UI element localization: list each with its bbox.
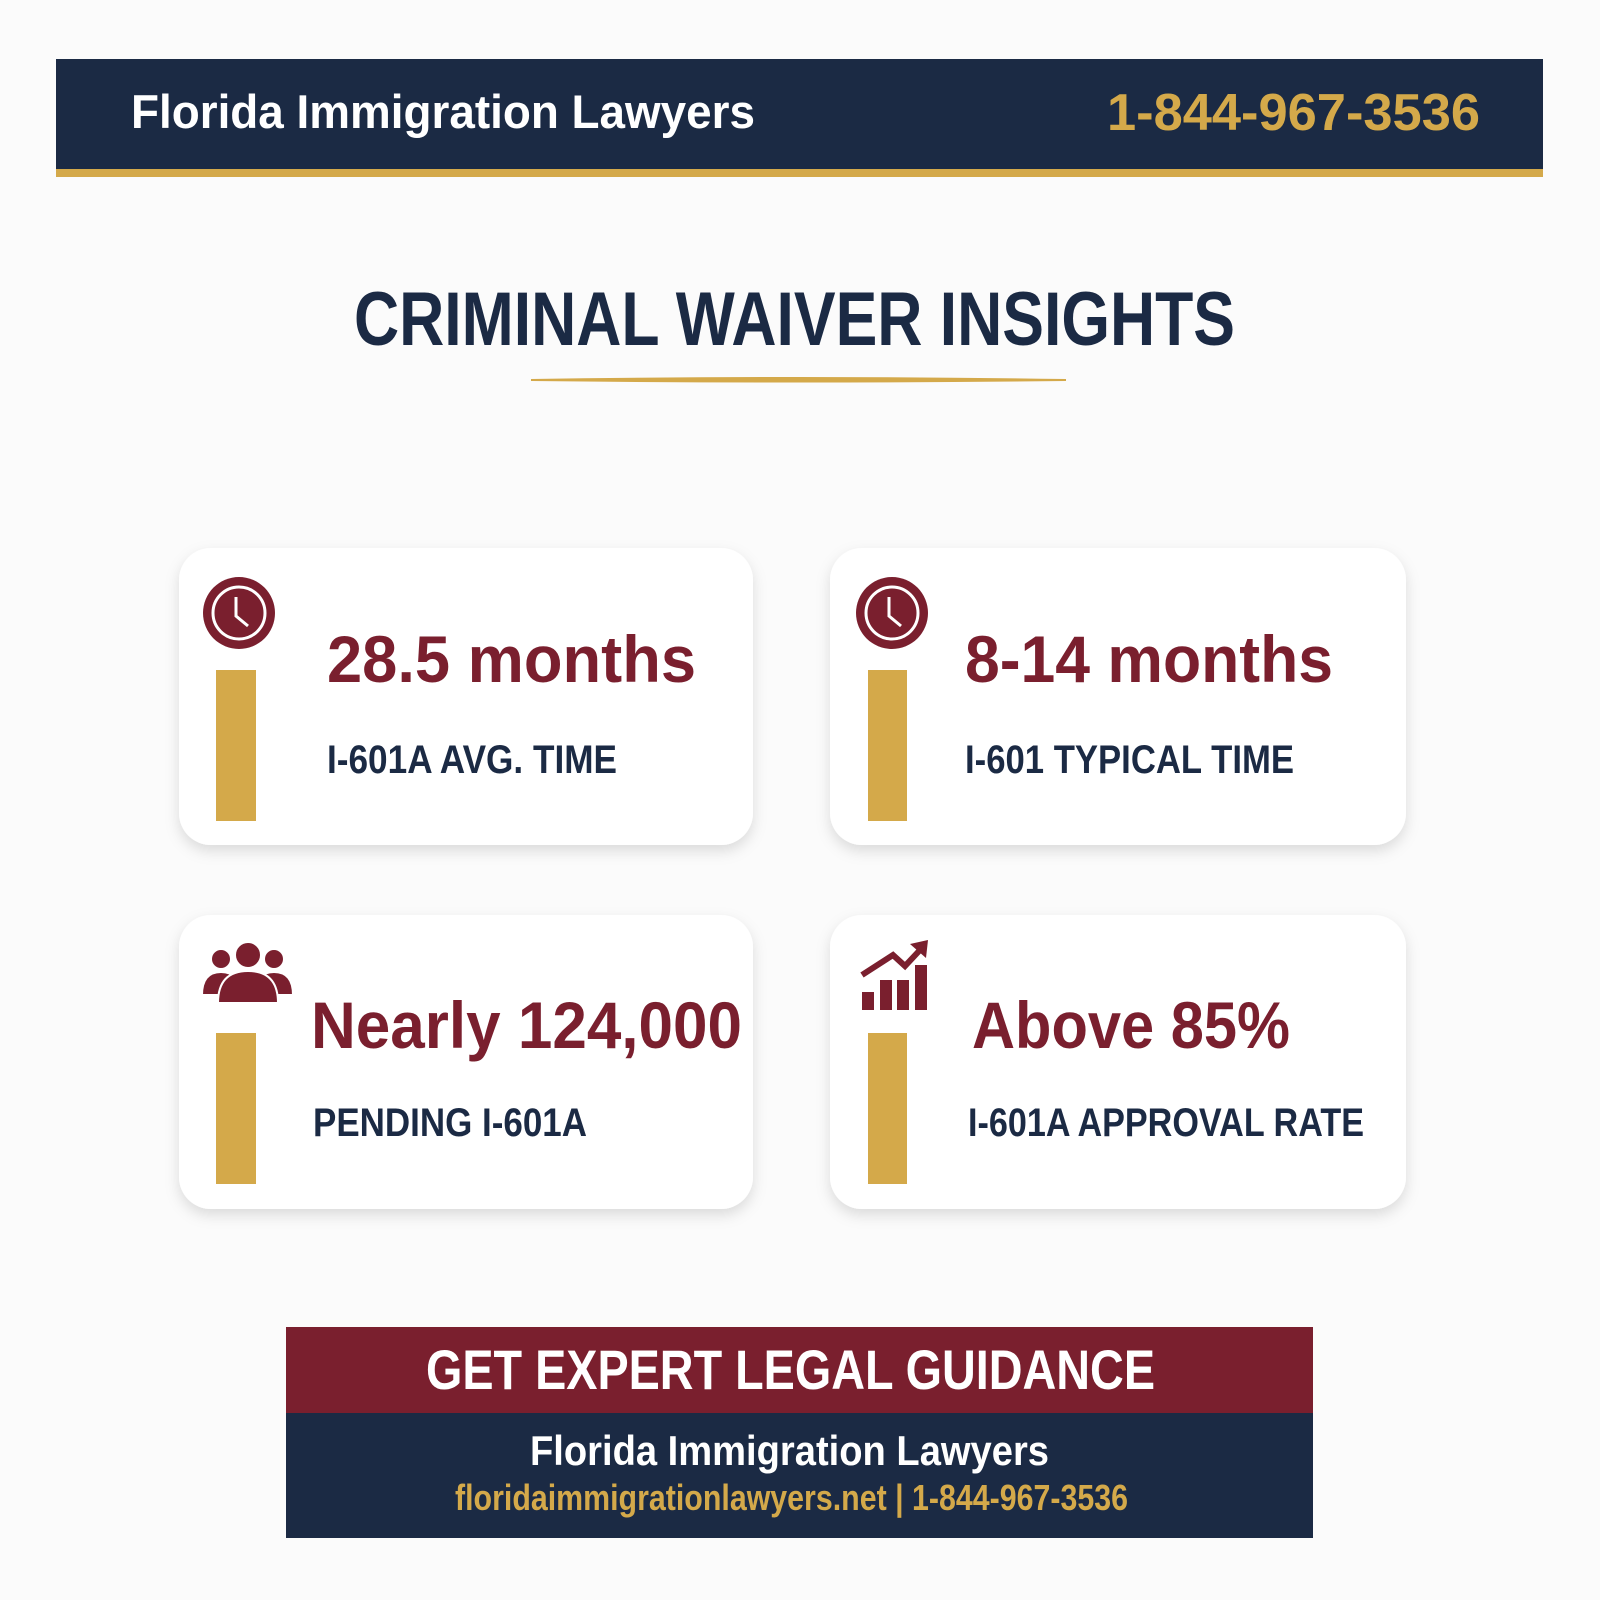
gold bar <box>868 670 907 821</box>
header phone: 1-844-967-3536 <box>1107 84 1480 142</box>
footer contact: floridaimmigrationlawyers.net | 1-844-967-3536 <box>455 1477 1128 1519</box>
title: CRIMINAL WAIVER INSIGHTS <box>354 277 1235 362</box>
header bar <box>56 59 1543 177</box>
card 4: approval rate <box>830 915 1406 1209</box>
label: I-601 TYPICAL TIME <box>965 738 1294 782</box>
icon: people <box>202 942 293 1003</box>
label: I-601A AVG. TIME <box>327 738 617 782</box>
CTA heading: GET EXPERT LEGAL GUIDANCE <box>426 1338 1155 1401</box>
label: PENDING I-601A <box>313 1101 587 1145</box>
card 3: pending I-601A <box>179 915 753 1209</box>
footer CTA <box>286 1327 1313 1538</box>
value: Above 85% <box>972 988 1290 1062</box>
label: I-601A APPROVAL RATE <box>968 1101 1364 1145</box>
card 2: I-601 typical time <box>830 548 1406 845</box>
gold bar <box>868 1033 907 1184</box>
gold bar <box>216 1033 256 1184</box>
title underline <box>531 378 1066 382</box>
footer firm name: Florida Immigration Lawyers <box>530 1427 1049 1474</box>
value: 28.5 months <box>327 622 696 696</box>
icon: clock <box>856 577 928 649</box>
value: Nearly 124,000 <box>311 988 742 1062</box>
icon: growth chart <box>862 940 928 1010</box>
value: 8-14 months <box>965 622 1333 696</box>
card 1: I-601A avg time <box>179 548 753 845</box>
icon: clock <box>203 577 275 649</box>
gold bar <box>216 670 256 821</box>
header firm name: Florida Immigration Lawyers <box>131 85 755 138</box>
